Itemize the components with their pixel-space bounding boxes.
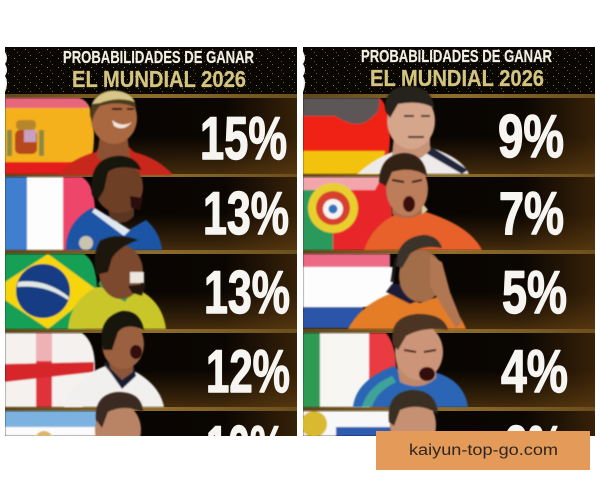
percent: Uruguay: 3%: [505, 414, 564, 480]
percent: Italy: 4%: [501, 338, 568, 405]
flag: Portugal: [303, 177, 392, 250]
player: Italy: [353, 314, 468, 407]
flag: Argentina: [5, 410, 97, 436]
heading: left title: [64, 50, 254, 88]
flag: Brazil: [5, 254, 97, 329]
player: Spain: [58, 90, 173, 175]
flag: England: [5, 333, 95, 407]
percent: Germany: 9%: [498, 103, 564, 170]
percent: Argentina: 10%: [206, 414, 285, 480]
percent: Brazil: 13%: [204, 259, 290, 326]
player: Brazil: [68, 236, 166, 329]
player: Uruguay: [388, 389, 438, 431]
player: Argentina: [94, 390, 144, 436]
flag: Netherlands: [303, 254, 393, 328]
heading: left title: EL MUNDIAL 2026: [72, 66, 246, 92]
flag: Spain: [5, 98, 94, 174]
player: Germany: [357, 86, 469, 174]
flag: Uruguay: [301, 411, 391, 437]
player: Netherlands: [348, 235, 466, 329]
panel: right ranking: [303, 47, 595, 436]
percent: England: 12%: [206, 338, 290, 405]
heading: right title: EL MUNDIAL 2026: [370, 65, 544, 91]
percent: Netherlands: 5%: [502, 259, 567, 326]
player: England: [64, 311, 164, 407]
flag: Italy: [303, 333, 396, 407]
flag: Germany: [303, 98, 390, 174]
percent: Portugal: 7%: [499, 180, 564, 247]
watermark banner: kaiyun-top-go.com: [409, 442, 558, 459]
player: Portugal: [364, 153, 482, 250]
heading: left title: PROBABILIDADES DE GANAR: [63, 47, 254, 67]
player: France: [66, 156, 162, 250]
watermark banner: [376, 431, 590, 470]
heading: right title: [362, 50, 552, 86]
flag: France: [5, 177, 95, 250]
panel: left ranking: [5, 47, 297, 436]
percent: France: 13%: [203, 180, 289, 247]
percent: Spain: 15%: [200, 105, 287, 172]
